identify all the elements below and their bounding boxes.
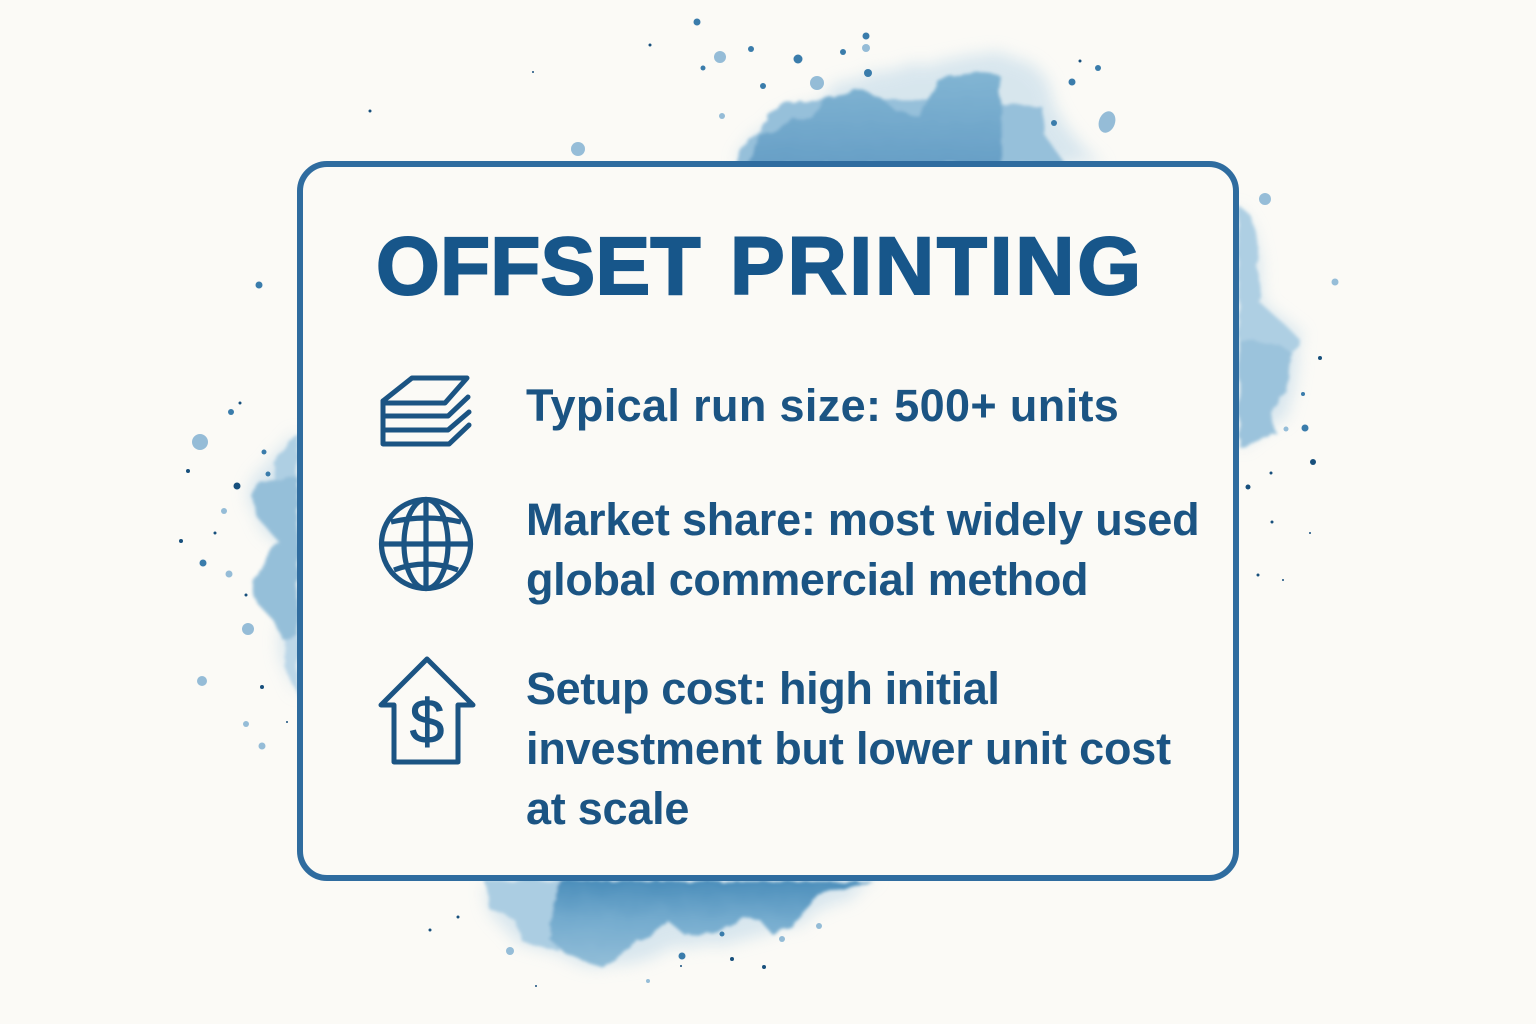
- text: run size: Typical run size: 500+ units: [526, 380, 1119, 431]
- left splash: [250, 432, 298, 697]
- top splash: [738, 72, 1066, 165]
- icon: house with dollar sign: $: [410, 688, 444, 757]
- ink speckles: [179, 18, 1338, 987]
- title: OFFSET: [376, 221, 701, 312]
- text: setup cost: [526, 663, 1171, 834]
- text: setup cost: Setup cost: high initial: [526, 663, 1000, 714]
- text: setup cost: investment but lower unit cost: [526, 723, 1171, 774]
- light halos: [246, 54, 1304, 968]
- text: market share: global commercial method: [526, 554, 1088, 605]
- bottom splash: [484, 880, 874, 968]
- framed card: [297, 161, 1239, 881]
- icon: stacked sheets: [380, 376, 472, 446]
- title: [376, 221, 1144, 312]
- title: PRINTING: [730, 221, 1144, 312]
- icon: globe: [378, 496, 474, 592]
- text: market share: Market share: most widely used: [526, 494, 1199, 545]
- text: market share: [526, 494, 1199, 605]
- text: setup cost: at scale: [526, 783, 689, 834]
- right splash: [1238, 205, 1300, 448]
- icon: house with dollar sign: [378, 656, 476, 764]
